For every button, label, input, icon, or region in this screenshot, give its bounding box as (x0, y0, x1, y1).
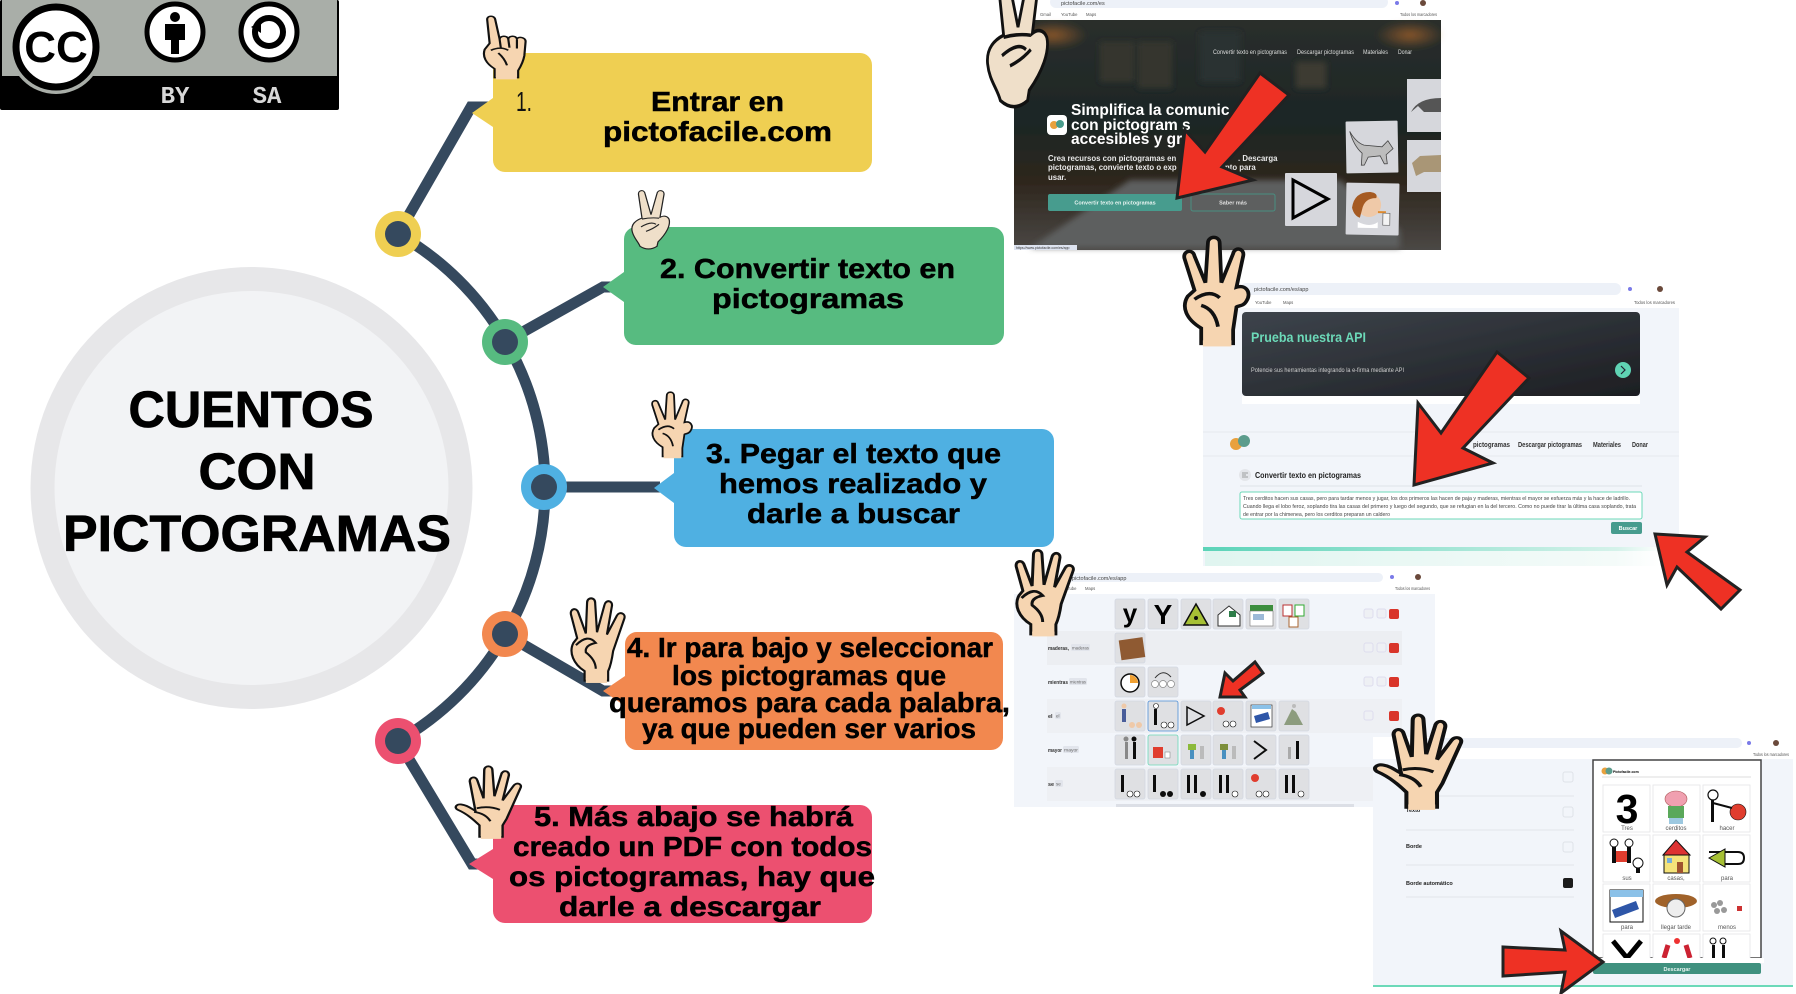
icon: large hand five fingers (1375, 715, 1461, 810)
screenshot 3: pictogram selection table: Maps (1085, 586, 1095, 591)
PDF tiles: para (1621, 925, 1634, 931)
license badge: CC BY-SA: SA (253, 84, 282, 111)
node 5 (375, 718, 421, 764)
row action buttons (1364, 609, 1399, 721)
screenshot 1: pictofacile home page: usar. (1048, 173, 1066, 182)
screenshot 1: pictofacile home page: nto para (1225, 163, 1256, 172)
arrow: to download button (1503, 931, 1603, 993)
PDF tiles: hacer (1719, 826, 1735, 832)
row labels: maderas, (1048, 646, 1069, 652)
arrow: to pictogram (1220, 662, 1263, 697)
step 5 callout: creado un PDF con todos (513, 831, 872, 862)
screenshot 1: pictofacile home page: Convertir texto en pictogramas (1213, 50, 1287, 56)
screenshot 2: text entry page: Materiales (1593, 442, 1621, 449)
screenshot 2: text entry page: Tres cerditos hacen sus casas, pero para tardar menos y jugar, los dos primeros las hacen de paja y maderas, mientras el mayor se esfuerza más y la hace de ladrillo. (1243, 496, 1630, 502)
icon: large hand four fingers (1016, 550, 1073, 636)
icon: hand three fingers (652, 392, 692, 458)
row tags: mayor (1064, 748, 1079, 752)
arrow: to text box (1414, 352, 1529, 485)
screenshot 1: pictofacile home page: pictogramas, convierte texto o exp (1048, 163, 1177, 172)
screenshot 1: pictofacile home page: accesibles y gr (1071, 131, 1182, 148)
PDF tiles: para (1721, 876, 1734, 882)
step 3 callout: 3. Pegar el texto que (706, 438, 1001, 469)
step 4 callout: los pictogramas que (672, 660, 946, 691)
screenshot 2: text entry page: Descargar pictogramas (1518, 442, 1582, 449)
screenshot 1: pictofacile home page: pictofacile.com/es (1061, 1, 1105, 7)
screenshot 1: pictofacile home page: Maps (1086, 12, 1096, 17)
screenshot 1: pictofacile home page: Simplifica la comunic (1071, 102, 1230, 119)
row labels: mayor (1048, 748, 1063, 754)
central circle with title (30, 267, 472, 709)
screenshot 1: pictofacile home page: Descargar pictogramas (1297, 50, 1354, 56)
screenshot 1: pictofacile home page: YouTube (1061, 12, 1078, 17)
PDF tiles: cerditos (1665, 826, 1687, 832)
screenshot 2: text entry page: Convertir texto en pictogramas (1255, 471, 1361, 480)
screenshot 4: PDF preview and download: Borde automático (1406, 881, 1453, 887)
PDF tiles: llegar tarde (1661, 925, 1692, 931)
tile: play triangle (1285, 173, 1337, 226)
screenshot 1: pictofacile home page: . Descarga (1238, 154, 1278, 163)
PDF tiles: casas, (1667, 876, 1685, 882)
screenshot 3: pictogram selection table (1014, 572, 1435, 807)
screenshot 2: text entry page: Prueba nuestra API (1251, 329, 1366, 345)
screenshot 3: pictogram selection table: Todos los marcadores (1395, 586, 1430, 591)
screenshot 4: PDF preview and download: Todos los marcadores (1753, 752, 1789, 757)
PDF tiles: 3 (1616, 786, 1638, 832)
step 1 callout (472, 53, 872, 172)
screenshot 2: text entry page: Donar (1632, 442, 1648, 449)
tile: cat (1346, 121, 1398, 173)
node 4 (482, 611, 528, 657)
PDF tiles: menos (1718, 925, 1736, 931)
screenshot 1: pictofacile home page (1014, 0, 1444, 250)
screenshot 3: pictogram selection table: YouTube (1060, 586, 1077, 591)
arrow: to convert button (1177, 73, 1289, 198)
step 1 callout: Entrar en (651, 86, 784, 117)
screenshot 2: text entry page: Buscar (1619, 526, 1638, 532)
tile grid: Y (1154, 599, 1173, 630)
title: CUENTOS (128, 381, 374, 438)
license badge: CC BY-SA: BY (161, 84, 190, 111)
node 1 (375, 211, 421, 257)
step 3 callout: hemos realizado y (719, 468, 987, 499)
step 2 callout: pictogramas (712, 283, 904, 314)
arrow: to search button (1655, 534, 1740, 609)
screenshot 1: pictofacile home page: Crea recursos con pictogramas en (1048, 154, 1177, 163)
tile: opossum (1407, 79, 1441, 132)
license badge: CC BY-SA: CC (24, 23, 88, 72)
tile: raccoon (1407, 140, 1441, 192)
screenshot 2: text entry page: Potencie sus herramientas integrando la e-firma mediante API (1251, 367, 1404, 374)
screenshot 2: text entry page: de entrar por la chimenea, pero los cerditos preparan un caldero (1243, 512, 1390, 518)
screenshot 4: PDF preview and download: Descargar (1664, 967, 1691, 973)
title: PICTOGRAMAS (63, 505, 451, 562)
screenshot 1: pictofacile home page: Todos los marcadores (1400, 12, 1437, 17)
row tags: el (1056, 714, 1060, 718)
step 5 callout: os pictogramas, hay que (509, 861, 875, 892)
timeline arc and branches (398, 107, 660, 864)
step 1 callout: 1. (516, 86, 532, 117)
step 2 callout: 2. Convertir texto en (660, 253, 955, 284)
icon: large hand two fingers (987, 0, 1048, 107)
step 4 callout (603, 632, 1010, 750)
node 3 (521, 464, 567, 510)
row tags: se (1056, 782, 1061, 786)
screenshot 1: pictofacile home page: Donar (1398, 50, 1412, 56)
screenshot 2: text entry page: Cuando llega el lobo feroz, soplando tira las casas del primero y luego del segundo, que se refugian en la del tercero. Como no puede tirar la última casa soplando, trata (1243, 504, 1636, 510)
step 5 callout: 5. Más abajo se habrá (534, 801, 853, 832)
screenshot 1: pictofacile home page: https://www.pictofacile.com/es/app (1016, 246, 1070, 250)
row tags: mientras (1070, 680, 1087, 684)
PDF tiles: Tres (1621, 826, 1633, 832)
step 5 callout (469, 801, 875, 923)
tile grid (1115, 598, 1309, 799)
screenshot 1: pictofacile home page: Gmail (1040, 12, 1051, 17)
icon: large hand three fingers (1184, 237, 1249, 346)
icon: hand five fingers (456, 766, 521, 839)
screenshot 4: PDF preview and download: Texto (1406, 808, 1421, 814)
step 3 callout (654, 429, 1054, 547)
node 2 (482, 319, 528, 365)
title: CON (198, 443, 316, 500)
tile grid: y (1123, 598, 1138, 628)
row tags (1055, 644, 1090, 787)
screenshot 2: text entry page: pictogramas (1473, 442, 1510, 449)
screenshot 2: text entry page: pictofacile.com/es/app (1254, 287, 1308, 293)
icon: hand four fingers (571, 598, 625, 683)
step 1 callout: pictofacile.com (603, 116, 832, 147)
screenshot 1: pictofacile home page: con pictogram (1071, 117, 1178, 134)
screenshot 4: PDF preview and download: Pictofacile.com (1613, 770, 1639, 774)
screenshot 1: pictofacile home page: Saber más (1219, 200, 1247, 206)
screenshot 3: pictogram selection table: pictofacile.com/es/app (1072, 576, 1126, 582)
row labels: se (1048, 782, 1054, 788)
screenshot 4: PDF preview and download (1373, 737, 1793, 987)
screenshot 2: text entry page: Todos los marcadores (1634, 300, 1675, 305)
PDF tiles: sus (1622, 876, 1632, 882)
screenshot 1: pictofacile home page: Materiales (1363, 50, 1388, 56)
PDF tiles (1603, 785, 1750, 964)
icon: hand one finger (484, 16, 526, 79)
step 4 callout: 4. Ir para bajo y seleccionar (627, 632, 993, 663)
blurred background decor (1019, 21, 1444, 248)
row labels (1048, 646, 1069, 788)
tile: boy drinking (1346, 183, 1399, 235)
step 5 callout: darle a descargar (559, 891, 821, 922)
row tags: maderas (1072, 646, 1090, 650)
icon: hand two fingers (632, 191, 669, 249)
step 4 callout: ya que pueden ser varios (642, 713, 976, 744)
row labels: el (1048, 714, 1053, 720)
row labels: mientras (1048, 680, 1068, 686)
screenshot 2: text entry page (1203, 283, 1679, 566)
step 3 callout: darle a buscar (747, 498, 960, 529)
title (63, 381, 451, 562)
step 4 callout: queramos para cada palabra, (609, 687, 1010, 718)
screenshot 4: PDF preview and download: Borde (1406, 844, 1422, 850)
screenshot 2: text entry page: YouTube (1255, 300, 1272, 305)
screenshot 1: pictofacile home page: s (1182, 117, 1191, 134)
license badge: CC BY-SA (0, 0, 339, 111)
screenshot 1: pictofacile home page: Convertir texto en pictogramas (1074, 200, 1156, 206)
step 2 callout (603, 227, 1004, 345)
screenshot 2: text entry page: Maps (1283, 300, 1293, 305)
